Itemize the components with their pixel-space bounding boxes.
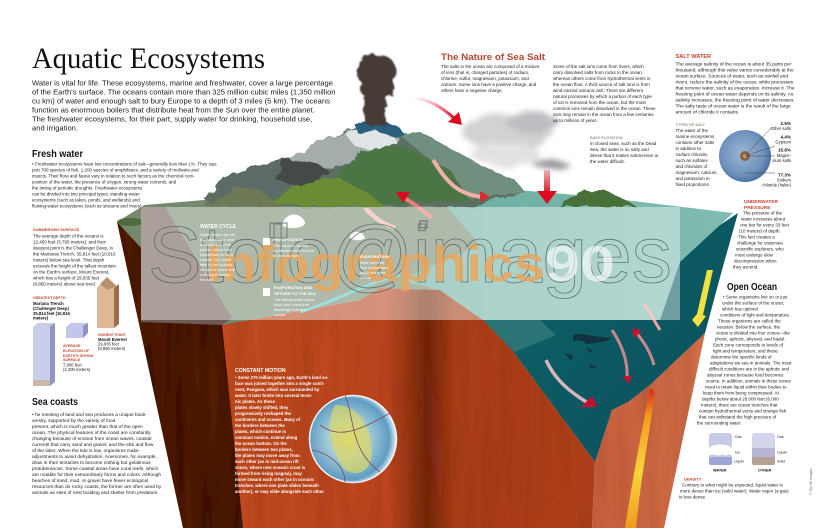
precipitation: The vapor in clouds bbox=[273, 243, 308, 248]
average elevation prism bbox=[66, 323, 88, 338]
body: changing because of erosion from ocean waves, coastal bbox=[32, 436, 151, 442]
body: of the tides. When the tide is low, organisms make bbox=[32, 448, 139, 454]
column two: the ocean floor. A third source of salt ions is from bbox=[553, 82, 650, 87]
types of salt: contains other salts bbox=[676, 140, 715, 145]
body: The average salinity of the ocean is about 35 parts per bbox=[676, 62, 792, 68]
body: plates slowly shifted, they bbox=[235, 405, 289, 410]
body: keep them from being compressed. At bbox=[703, 390, 780, 396]
body: thousand, although this value varies considerably at the bbox=[676, 68, 794, 74]
body: which has a height of 29,035 feet bbox=[33, 276, 100, 280]
return to the sea: discharge into the bbox=[274, 307, 306, 312]
number marker bbox=[263, 288, 270, 296]
arrow: wind to cloud bbox=[410, 98, 462, 125]
column two: Some of the salt ions come from rivers, which bbox=[553, 64, 644, 69]
body: The pressure of the bbox=[743, 210, 783, 216]
intro paragraph: The freshwater ecosystems, for their part, supply water for drinking, household use, bbox=[32, 114, 312, 124]
body: (10 meters) of depth. bbox=[739, 228, 781, 234]
body: This fact creates a bbox=[738, 234, 775, 240]
body: scientific explorers, who bbox=[736, 246, 784, 252]
body: deepest point is the Challenger Deep, in bbox=[33, 246, 114, 250]
return to the sea: The falling water flows bbox=[274, 297, 314, 302]
body: water increases about bbox=[741, 216, 786, 222]
return to the sea: back and rivers that bbox=[274, 302, 310, 307]
types of salt: sodium chloride, bbox=[676, 152, 708, 157]
body: determine the specific kinds of bbox=[711, 354, 772, 360]
body: flowing-water ecosystems (such as streams and rivers). bbox=[32, 204, 143, 208]
salt percentages: 15.8% bbox=[778, 148, 791, 152]
panel: underwater pressure bbox=[733, 199, 790, 270]
greatest depth label: (Challenger Deep) bbox=[33, 306, 69, 311]
panel: sea coasts bbox=[32, 397, 162, 496]
body: These organisms are called the bbox=[718, 318, 781, 324]
column one: The salts in the ocean are composed of a mixture bbox=[441, 64, 540, 69]
body: they ascend. bbox=[733, 264, 759, 270]
body: The salty taste of ocean water is the result of the large bbox=[676, 104, 791, 110]
arrow: upper pale current bbox=[644, 304, 660, 330]
watermark white number: 90 bbox=[545, 236, 615, 292]
side note: Sun evaporates bbox=[360, 265, 388, 270]
body: 12,450 feet (3,795 meters), and their bbox=[33, 240, 107, 244]
average elevation label: ELEVATION OF bbox=[63, 349, 90, 353]
body: • Freshwater ecosystems have low concentrations of salt—generally less than 1%. They sup- bbox=[32, 162, 218, 166]
body: neuston. Below the surface, the bbox=[717, 324, 781, 330]
body: port 700 species of fish, 1,200 species of amphibians, and a variety of mollusks and bbox=[32, 168, 199, 172]
heading: SALT WATER bbox=[676, 54, 711, 60]
highest point label: 29,035 feet bbox=[98, 342, 120, 346]
intro paragraph: and irrigation. bbox=[32, 124, 78, 132]
highest point label: (8,850 meters) bbox=[98, 346, 126, 351]
average elevation label: (2,400 meters) bbox=[63, 367, 91, 372]
text: plants. Vapor then bbox=[200, 247, 232, 252]
body: protuberances. Some coastal areas have coral reefs, which bbox=[32, 466, 158, 472]
body: borders between two plates, bbox=[235, 447, 293, 452]
watermark outline text: Stolo@images bbox=[148, 210, 672, 299]
column two: ions may remain in the ocean from a few centuries bbox=[553, 112, 654, 117]
side note: Heat from the bbox=[360, 260, 385, 265]
plate tectonics globe bbox=[310, 395, 396, 482]
number marker bbox=[263, 238, 270, 245]
body: ocean surface. Sources of water, such as rainfall and bbox=[676, 74, 788, 80]
body: animals as sites of nest building and shelter from predators. bbox=[32, 490, 159, 496]
beaker labels: Gas bbox=[735, 435, 742, 439]
body: must undergo slow bbox=[735, 252, 774, 258]
body: adjustments to avoid dehydration. Anemones, for example, bbox=[32, 454, 157, 460]
panel: salt water bbox=[676, 54, 795, 188]
body: rivers, reduce the salinity of the ocean, while processes bbox=[676, 80, 794, 86]
side note: EVAPORATION bbox=[360, 254, 389, 259]
greatest depth label: meters) bbox=[33, 316, 49, 320]
Everest prism bbox=[97, 277, 119, 328]
translucent panel band bbox=[141, 207, 680, 320]
beaker captions: WATER bbox=[713, 468, 727, 472]
illustration: ocean cross-section bbox=[117, 54, 738, 528]
body: salinity increases, the freezing point of water decreases. bbox=[676, 98, 795, 104]
intro paragraph: of the Earth's surface. The oceans contain more than 325 million cubic miles (1,350 million bbox=[32, 88, 336, 96]
average elevation label: EARTH'S DRYING bbox=[63, 354, 94, 358]
square marker bbox=[270, 223, 287, 238]
column one: others have a negative charge. bbox=[441, 88, 503, 93]
panel: submerged surface bbox=[33, 227, 127, 386]
column two: up to millions of years. bbox=[553, 118, 598, 123]
salt percentages: chloride (halite) bbox=[762, 182, 792, 188]
body: challenge for undersea bbox=[737, 240, 783, 246]
body: face was joined together into a single conti- bbox=[235, 381, 325, 386]
body: plates, which continue in bbox=[235, 429, 286, 434]
precipitation: PRECIPITATION bbox=[273, 237, 303, 242]
highest point label: HIGHEST POINT bbox=[98, 333, 127, 337]
body: the surrounding water. bbox=[697, 420, 742, 426]
body: the plates may move away from bbox=[235, 453, 300, 458]
side note: ocean. bbox=[360, 275, 372, 280]
text: by evaporation and bbox=[200, 237, 234, 242]
intro paragraph: cu km) of water and enough salt to bury Europe to a depth of 3 miles (5 km). The oceans bbox=[32, 96, 330, 106]
body: The average depth of the oceans is bbox=[33, 234, 104, 238]
body: difficult conditions are in the aphotic and bbox=[709, 366, 789, 372]
precipitation: to land as rain. bbox=[273, 253, 299, 258]
types of salt: in addition to bbox=[676, 146, 702, 151]
body: ecosystems (such as lakes, ponds, and wetlands) and bbox=[32, 198, 140, 202]
sea surface bbox=[400, 186, 733, 320]
easy flotation: In closed seas, such as the Dead bbox=[590, 141, 657, 146]
density note: is less dense. bbox=[679, 494, 706, 500]
density note: DENSITY bbox=[684, 476, 702, 482]
beaker labels: Gas bbox=[777, 435, 784, 439]
volcanic plume bbox=[357, 54, 397, 125]
body: meters), there are ocean trenches that bbox=[701, 402, 778, 408]
column two: common ions remain dissolved in the ocean. These bbox=[553, 106, 656, 111]
body: progressively reshaped the bbox=[235, 411, 291, 416]
heading: The Nature of Sea Salt bbox=[441, 52, 545, 62]
return to the sea: EVAPORATION AND bbox=[274, 285, 312, 290]
body: constant motion, extend along bbox=[235, 435, 298, 440]
body: beaches of sand, mud, or gravel have fewer ecological bbox=[32, 478, 148, 484]
body: depths below about 20,000 feet (6,000 bbox=[702, 396, 779, 402]
salt composition sphere bbox=[719, 127, 775, 182]
easy flotation: dense that it makes submersion in bbox=[590, 153, 659, 158]
cloud bbox=[462, 112, 568, 167]
coast stream bbox=[300, 275, 400, 312]
arrow: deep current right bbox=[632, 328, 654, 365]
body: decompression when bbox=[734, 258, 777, 264]
body: currents that carry sand and gravel, and the ebb and flow bbox=[32, 442, 154, 448]
body: (8,850 meters) above sea level. bbox=[33, 282, 96, 286]
body: position of the water, the presence of oxygen, strong water currents, and bbox=[32, 180, 177, 184]
arrow: yellow current bbox=[692, 270, 713, 327]
types of salt: The water of the bbox=[676, 128, 709, 133]
body: zones, where new oceanic crust is bbox=[235, 465, 306, 470]
body: Each zone corresponds to levels of bbox=[713, 342, 784, 348]
lava vent bbox=[625, 388, 655, 528]
small square marker bbox=[420, 221, 427, 228]
panel: constant motion bbox=[234, 368, 329, 494]
greatest depth label: GREATEST DEPTH bbox=[33, 296, 66, 300]
text: clouds. The water bbox=[200, 257, 232, 262]
salt percentages: Other salts bbox=[771, 126, 791, 131]
river bbox=[350, 187, 395, 228]
body: one bar for every 33 feet bbox=[740, 222, 790, 228]
types of salt: marine ecosystems bbox=[676, 134, 715, 139]
body: that can withstand the high pressure of bbox=[699, 414, 777, 420]
body: draw in their tentacles to become nothing but gelatinous bbox=[32, 460, 151, 466]
body: exceeds the height of the tallest mountain bbox=[33, 264, 117, 268]
highest point label: Mount Everest bbox=[98, 337, 127, 342]
panel: fresh water bbox=[32, 149, 218, 208]
types of salt: and chlorides of bbox=[676, 164, 708, 169]
body: • Some organisms live on or just bbox=[723, 294, 788, 300]
easy flotation: EASY FLOTATION bbox=[590, 136, 623, 140]
salt percentages: Sodium bbox=[777, 178, 792, 182]
salt percentages: 2.5% bbox=[781, 121, 791, 126]
body: can be divided into two principal types: standing-water bbox=[32, 192, 140, 196]
lit wedge in water bbox=[483, 320, 556, 352]
column two: wind-carried volcanic ash. There are different bbox=[553, 88, 644, 93]
body: light and temperature, and these bbox=[713, 348, 778, 354]
density note: more dense than ice (solid water). Water vapor (a gas) bbox=[680, 488, 789, 494]
side note: water from the bbox=[360, 270, 386, 275]
salt percentages: sium salts bbox=[772, 158, 791, 163]
orange earth face bbox=[592, 333, 705, 528]
heading: Fresh water bbox=[32, 149, 83, 160]
body: the timing of periodic droughts. Freshwater ecosystems bbox=[32, 186, 143, 190]
body: versity, supported by the variety of food bbox=[32, 418, 116, 424]
heading: Sea coasts bbox=[32, 397, 78, 408]
heading: CONSTANT MOTION bbox=[235, 368, 286, 374]
salt percentages: Magne- bbox=[777, 153, 792, 158]
panel: nature of sea salt bbox=[441, 52, 659, 164]
coastal clouds bbox=[283, 214, 365, 240]
body: formed from rising magma), may bbox=[235, 471, 302, 476]
deepest prism bbox=[33, 323, 55, 386]
return to the sea: RETURN TO THE SEA bbox=[274, 291, 316, 296]
mountain massif bbox=[205, 118, 525, 207]
body: present, which is much greater than that of the open bbox=[32, 424, 143, 430]
watermark orange text: Infographics bbox=[206, 236, 545, 292]
heading: WATER CYCLE bbox=[200, 224, 237, 230]
types of salt: and potassium in bbox=[676, 176, 710, 181]
beaker captions: OTHER bbox=[758, 468, 772, 472]
body: need to retain liquid within their bodies to bbox=[705, 384, 787, 390]
water cycle panel bbox=[200, 221, 427, 317]
salt percentages: Gypsum bbox=[775, 140, 792, 144]
greatest depth label: Mariana Trench bbox=[33, 301, 64, 306]
body: are notable for their extraordinary forms and colors. Although bbox=[32, 472, 161, 478]
column one: of ions (that is, charged particles) of sodium, bbox=[441, 70, 529, 75]
types of salt: TYPES OF SALT bbox=[676, 123, 706, 127]
body: the borders between the bbox=[235, 423, 285, 428]
text: transpiration from bbox=[200, 242, 232, 247]
beaker labels: Liquid bbox=[777, 450, 787, 454]
credit: © Sol 90 Images bbox=[809, 468, 813, 495]
heading: UNDERWATER bbox=[744, 199, 778, 205]
teal water column bbox=[483, 213, 738, 462]
text: Water enters the air bbox=[200, 232, 236, 237]
body: nic plates. As these bbox=[235, 399, 276, 404]
average elevation label: SURFACE bbox=[63, 358, 81, 362]
body: conditions of light and temperature. bbox=[720, 312, 790, 318]
dark left wall bbox=[117, 205, 243, 528]
body: which has optimal bbox=[722, 306, 758, 312]
greatest depth label: 35,814 feet (10,916 bbox=[33, 311, 70, 316]
body: each other (as in mid-ocean rift bbox=[235, 459, 299, 464]
types of salt: magnesium, calcium, bbox=[676, 170, 718, 175]
arrow: rain bbox=[537, 170, 557, 204]
text: the sea. bbox=[200, 277, 214, 282]
green hill cap bbox=[117, 218, 143, 226]
beaker labels: Solid bbox=[777, 460, 785, 464]
body: water. It later broke into several tecto- bbox=[234, 393, 313, 398]
types of salt: such as sulfates bbox=[676, 158, 709, 163]
body: scarce. In addition, animals in these zones bbox=[706, 378, 792, 384]
text: runs back toward bbox=[200, 272, 230, 277]
arrow: deep current mid bbox=[612, 330, 632, 384]
heading: Open Ocean bbox=[727, 282, 777, 293]
return to the sea: ocean. bbox=[274, 312, 286, 317]
body: ocean is divided into four zones—the bbox=[716, 330, 790, 336]
arrow: deep current left bbox=[546, 360, 597, 407]
average elevation label: AVERAGE bbox=[63, 344, 81, 348]
water beaker bbox=[708, 433, 733, 465]
body: meters) below sea level. That depth bbox=[33, 258, 105, 262]
column one: chlorine, sulfur, magnesium, potassium, and bbox=[441, 76, 529, 81]
body: photic, aphotic, abyssal, and hadal. bbox=[715, 336, 785, 342]
salt percentages: 4.4% bbox=[781, 134, 791, 140]
body: resources than do rocky coasts, the former are often used by bbox=[32, 484, 162, 490]
heading: PRESSURE bbox=[744, 205, 771, 211]
column two: whereas others come from hydrothermal vents in bbox=[553, 76, 651, 81]
body: nent, Pangaea, which was surrounded by bbox=[235, 387, 320, 392]
arrow: mountain runoff bbox=[433, 160, 490, 202]
precipitation: condenses and returns bbox=[273, 248, 314, 253]
body: • he meeting of land and sea produces a unique biodi- bbox=[32, 412, 147, 418]
easy flotation: the water difficult. bbox=[590, 159, 625, 164]
intro paragraph: Water is vital for life. These ecosystems, marine and freshwater, cover a large percentage bbox=[32, 78, 333, 88]
body: that remove water, such as evaporation, increase it. The bbox=[676, 86, 795, 92]
body: contain hydrothermal vents and strange fish bbox=[699, 408, 787, 414]
other beaker bbox=[752, 433, 775, 465]
body: trenches, where one plate slides beneath bbox=[235, 483, 319, 488]
average elevation label: 7,900 feet bbox=[63, 362, 82, 368]
body: ocean. The physical features of the coast are constantly bbox=[32, 430, 151, 436]
body: adaptations we see in animals. The most bbox=[710, 360, 792, 366]
body: continents and oceans. Many of bbox=[235, 417, 301, 422]
beaker labels: Liquid bbox=[734, 460, 744, 464]
text: falls to the surface bbox=[200, 262, 233, 267]
column two: of ion is removed from the ocean, but the most bbox=[553, 100, 647, 105]
easy flotation: Sea, the water is so salty and bbox=[590, 147, 649, 152]
salt percentages: 77.3% bbox=[778, 172, 791, 178]
body: amount of chloride it contains. bbox=[676, 110, 739, 116]
body: on the Earth's surface, Mount Everest, bbox=[33, 270, 109, 274]
arrow: uplift bbox=[396, 192, 432, 218]
offshore island bbox=[560, 190, 637, 207]
marine animals bbox=[565, 334, 612, 369]
panel: open ocean bbox=[679, 282, 792, 500]
body: abyssal zones because food becomes bbox=[707, 372, 784, 378]
heading: SUBMERGED SURFACE bbox=[33, 227, 80, 232]
text: as rain or snow and bbox=[200, 267, 235, 272]
body: the Marianas Trench, 35,814 feet (10,916 bbox=[33, 252, 116, 256]
body: under the surface of the ocean, bbox=[722, 300, 784, 306]
density note: Contrary to what might be expected, liquid water is bbox=[682, 482, 784, 488]
body: • Some 270 million years ago, Earth's land su- bbox=[235, 375, 329, 380]
land surface bbox=[117, 192, 540, 325]
red earth face bbox=[222, 288, 595, 528]
body: freezing point of ocean water depends on its salinity. As bbox=[676, 92, 794, 98]
types of salt: fixed proportions. bbox=[676, 182, 710, 187]
body: another), or may slide alongside each other. bbox=[235, 489, 325, 494]
body: move toward each other (as in oceanic bbox=[235, 477, 315, 482]
body: the ocean bottom. On the bbox=[235, 441, 287, 446]
column two: natural processes by which a portion of each type bbox=[553, 94, 652, 99]
column one: calcium. Some ions have a positive charge, and bbox=[441, 82, 537, 87]
intro paragraph: function as enormous boilers that distribute heat from the Sun over the entire planet. bbox=[32, 106, 315, 114]
land brown corner bbox=[141, 207, 232, 325]
text: condenses to form bbox=[200, 252, 234, 257]
body: insects. Their flora and fauna vary in relation to such factors as the chemical com- bbox=[32, 174, 195, 178]
column two: carry dissolved salts from rocks to the ocean, bbox=[553, 70, 643, 75]
title: Aquatic Ecosystems bbox=[32, 43, 265, 75]
beaker labels: Ice bbox=[735, 450, 740, 454]
